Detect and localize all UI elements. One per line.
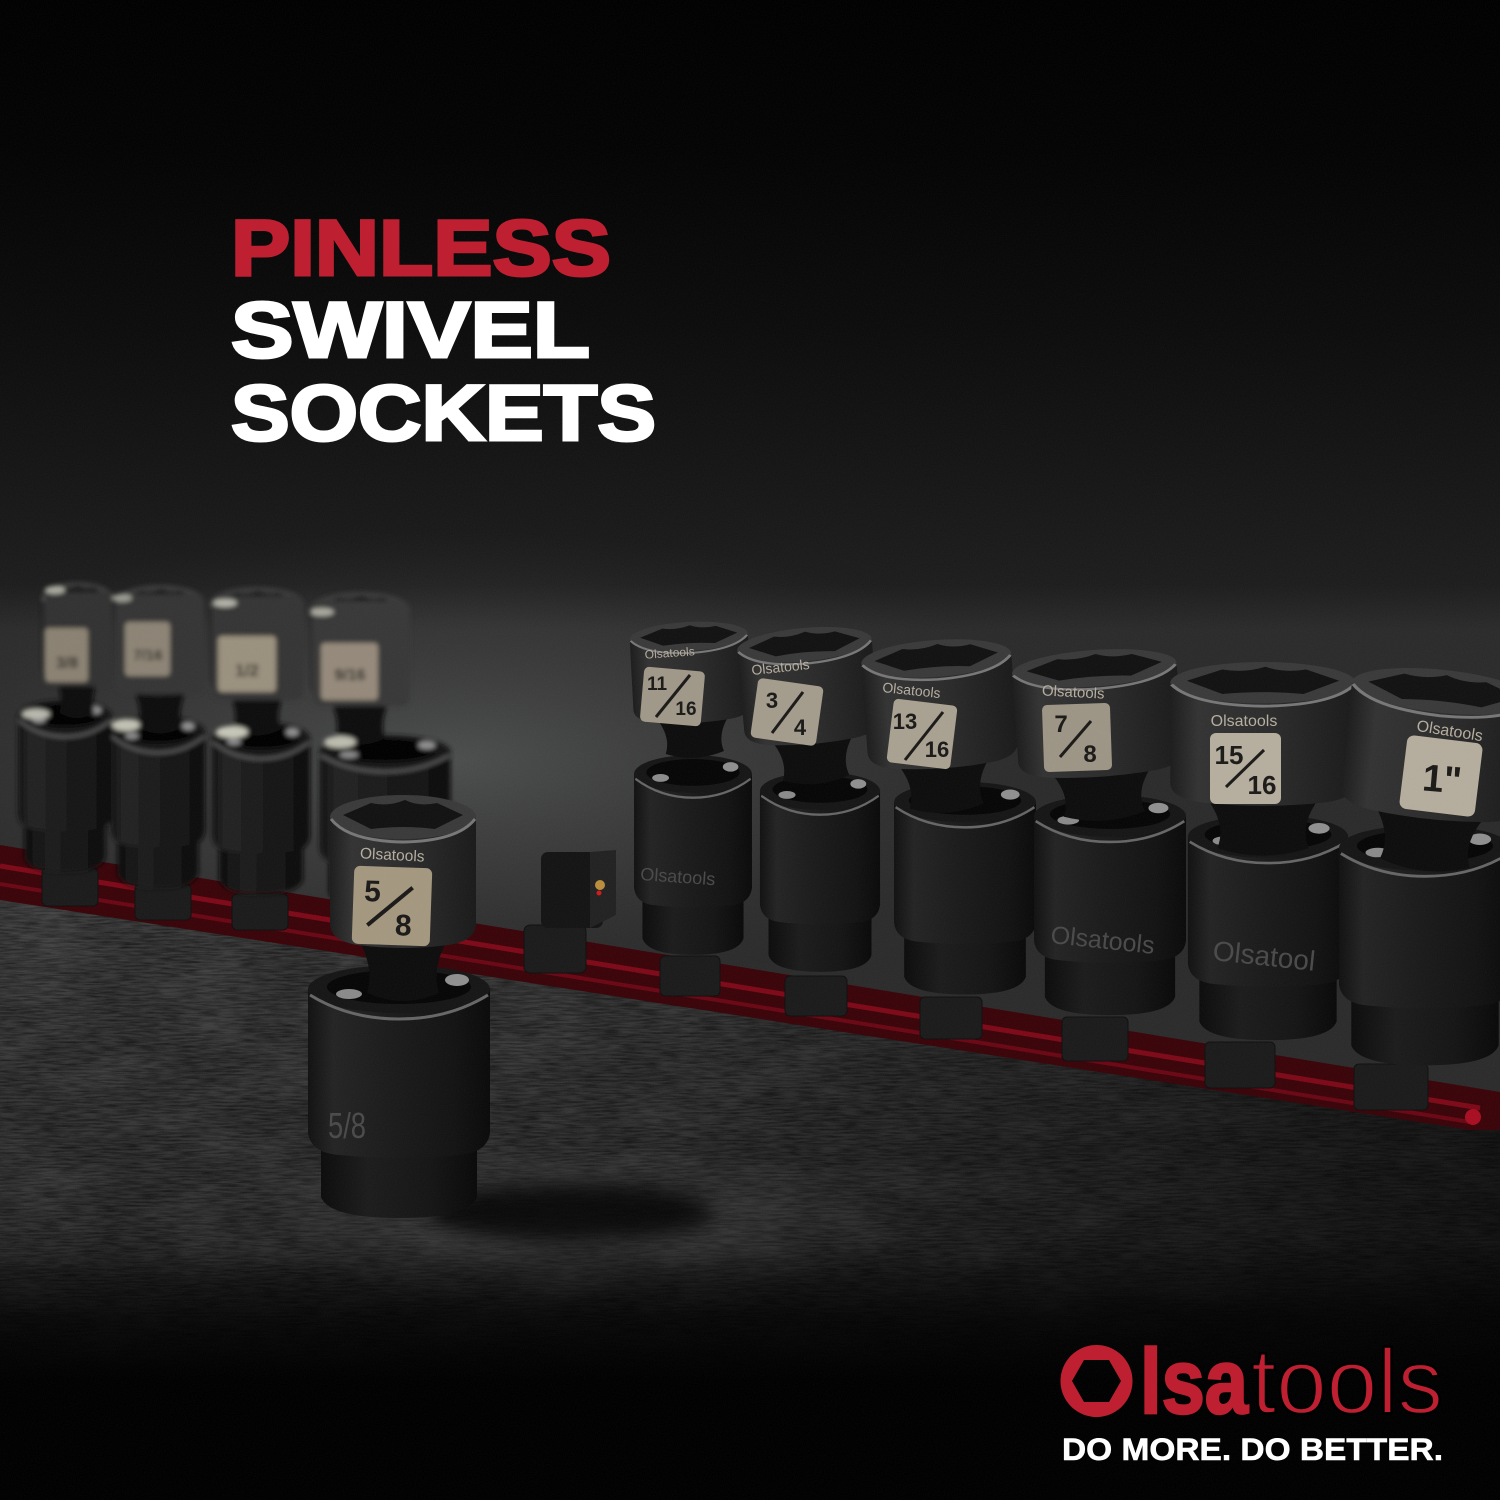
far socket 7/16: 7/16 (133, 647, 163, 664)
far socket 9/16: 9/16 (334, 667, 366, 684)
far socket 9/16 (310, 592, 451, 907)
socket 3/4: 4 (794, 715, 807, 740)
socket 7/8: 7 (1054, 711, 1068, 738)
size label 5/8 (352, 866, 432, 946)
socket 15/16: 15 (1215, 740, 1243, 770)
socket 1 inch (1333, 660, 1500, 1065)
socket 15/16 (1170, 662, 1356, 1040)
socket 3/4 (736, 622, 884, 972)
background glow behind the far sockets (0, 530, 1070, 990)
socket 13/16: Olsatools (882, 679, 941, 701)
shadow of the foreground socket (425, 1182, 715, 1242)
socket 13/16: 16 (925, 737, 949, 762)
far socket 1/2: 1/2 (235, 661, 259, 680)
socket 15/16: 16 (1248, 770, 1276, 800)
socket 13/16: 13 (893, 709, 917, 734)
socket 1 inch: 1" (1421, 757, 1463, 803)
logo icon: hexagon O (1061, 1345, 1133, 1417)
socket 15/16: Olsatool (1211, 935, 1317, 977)
socket 11/16: Olsatools (640, 864, 716, 889)
socket 7/8: Olsatools (1042, 682, 1105, 703)
black mat surface (0, 895, 1500, 1500)
socket 7/8: 8 (1083, 741, 1097, 768)
socket 11/16: 16 (675, 699, 697, 720)
socket 11/16: Olsatools (644, 644, 695, 662)
socket 3/4: 3 (766, 688, 778, 713)
title: pinless swivel sockets (231, 203, 656, 457)
size label 5/8: 8 (394, 909, 412, 943)
logo: Olsatools (1061, 1331, 1443, 1433)
socket 15/16: Olsatools (1211, 713, 1277, 730)
wordmark bold part: lsa (1140, 1331, 1249, 1433)
wordmark light part: tools (1251, 1331, 1443, 1433)
far socket 3/8: 3/8 (56, 655, 78, 672)
title line 3: SOCKETS (231, 368, 656, 457)
tagline: DO MORE. DO BETTER. (1062, 1431, 1443, 1467)
socket 7/8: Olsatools (1049, 921, 1156, 960)
socket 3/4: Olsatools (751, 656, 810, 678)
socket 11/16 (629, 619, 754, 955)
blurred far sockets group (18, 582, 451, 907)
magnetic red socket rail (0, 845, 1500, 1130)
socket 1 inch: Olsatools (1415, 718, 1484, 745)
title line 1: PINLESS (231, 203, 611, 292)
engraved size: 5/8 (328, 1105, 366, 1146)
far socket 3/8 (18, 582, 112, 872)
socket 11/16: 11 (647, 674, 667, 695)
far socket 1/2 (210, 587, 310, 894)
rail clips (42, 868, 1428, 1110)
brand mark on socket: Olsatools (360, 845, 425, 866)
title line 2: SWIVEL (231, 285, 590, 374)
socket 7/8 (1011, 644, 1187, 1015)
size label 5/8: 5 (364, 875, 381, 909)
foreground socket 5/8 (308, 795, 490, 1218)
square drive adapter on rail (541, 850, 616, 928)
far socket 7/16 (111, 585, 205, 888)
socket 13/16 (860, 635, 1036, 995)
bottom fade to black (0, 1240, 1500, 1380)
